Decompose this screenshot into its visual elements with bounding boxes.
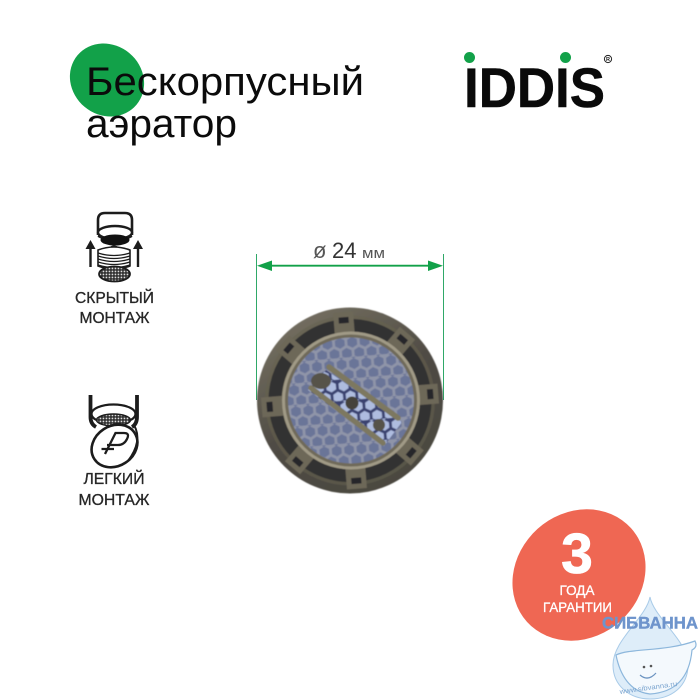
label: easy mounting: [78, 470, 150, 509]
retaining tabs: [255, 305, 445, 496]
aerator product photo: [255, 305, 445, 496]
icon: hidden mounting: [86, 213, 143, 282]
warranty badge: 3: [561, 522, 593, 586]
title: Бескорпусный: [86, 60, 364, 104]
watermark: Сибванна: [602, 597, 698, 699]
IDDIS logo: IDDIS: [464, 56, 605, 119]
outer rim: [257, 308, 443, 494]
label: easy mounting: ЛЕГКИЙ: [84, 470, 144, 488]
IDDIS logo: R: [606, 57, 610, 63]
warranty badge: ГОДА: [560, 583, 594, 598]
label: easy mounting: МОНТАЖ: [78, 492, 150, 509]
diagonal bars: [329, 367, 398, 418]
green blob behind title: [55, 28, 159, 132]
dimension: diameter 24 mm: 24: [332, 238, 356, 263]
title: [86, 60, 364, 146]
dimension: diameter 24 mm: мм: [362, 245, 385, 262]
dimension: diameter 24 mm: [256, 238, 444, 400]
icon: ruble saving: [83, 395, 146, 476]
slots: [255, 305, 445, 496]
warranty badge: [485, 482, 673, 668]
dimension: diameter 24 mm: ø: [313, 238, 326, 263]
inner ring: [282, 332, 420, 470]
label: hidden mounting: СКРЫТЫЙ: [75, 289, 154, 307]
label: hidden mounting: [75, 289, 154, 327]
warranty badge: ГАРАНТИИ: [543, 600, 612, 615]
watermark: Сибванна: СИБВАННА: [602, 614, 698, 632]
watermark: Сибванна: www.sibvanna.ru: [618, 681, 678, 696]
mesh: [285, 335, 417, 467]
label: hidden mounting: МОНТАЖ: [80, 310, 150, 327]
title: аэратор: [86, 102, 237, 146]
